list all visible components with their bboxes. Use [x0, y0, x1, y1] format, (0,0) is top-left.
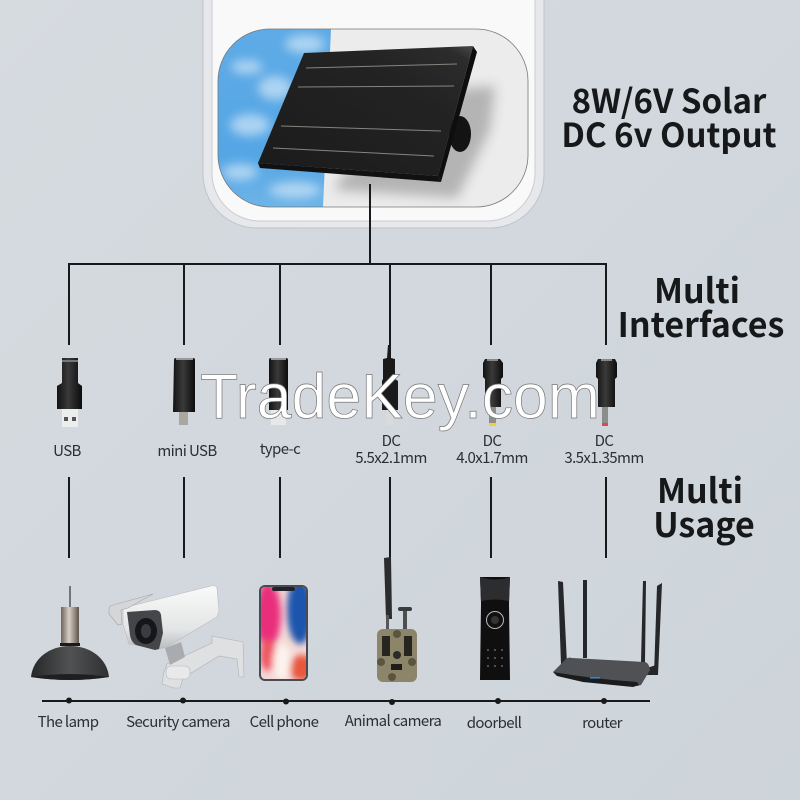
icon: solar panel — [258, 46, 477, 182]
icon: router — [553, 580, 662, 687]
wiring: interface bus — [68, 184, 607, 345]
icon: DC 4.0x1.7 connector — [483, 359, 503, 426]
label: DC 5.5x2.1mm: DC — [382, 430, 401, 451]
icon: USB connector — [57, 358, 82, 427]
label: mini USB: mini USB — [157, 440, 217, 461]
label: doorbell: doorbell — [467, 712, 522, 733]
watermark: TradeKey.com — [200, 362, 600, 432]
icon: doorbell — [480, 577, 510, 680]
heading: solar spec: 8W/6V Solar — [572, 75, 767, 123]
heading: multi usage: Multi — [657, 464, 743, 513]
icon: animal camera — [377, 557, 417, 682]
label: USB: USB — [53, 440, 82, 461]
label: DC 3.5x1.35mm: DC — [595, 430, 614, 451]
icon: lamp — [31, 586, 109, 680]
label: DC 5.5x2.1mm: 5.5x2.1mm — [355, 447, 427, 468]
heading: solar spec: DC 6v Output — [561, 109, 777, 157]
label: The lamp: The lamp — [38, 711, 99, 732]
photo backdrop — [218, 29, 528, 207]
label: DC 4.0x1.7mm — [456, 430, 528, 468]
label: DC 4.0x1.7mm: 4.0x1.7mm — [456, 447, 528, 468]
icon: security camera — [109, 586, 244, 688]
label: DC 4.0x1.7mm: DC — [483, 430, 502, 451]
icon: DC 3.5x1.35 connector — [596, 359, 617, 426]
icon: mini USB connector — [173, 358, 195, 425]
label: Cell phone: Cell phone — [250, 711, 319, 732]
label: Animal camera: Animal camera — [345, 710, 441, 731]
icon: DC 5.5x2.1 connector — [382, 345, 398, 425]
heading: multi usage: Usage — [653, 498, 755, 547]
label: type-c: type-c — [260, 438, 301, 459]
timeline: device baseline — [42, 698, 650, 705]
label: DC 5.5x2.1mm — [355, 430, 427, 468]
label: router: router — [582, 712, 623, 733]
label: Security camera: Security camera — [126, 711, 230, 732]
icon: type-c connector — [269, 358, 288, 425]
heading: multi interfaces: Interfaces — [618, 298, 784, 347]
wiring: usage connectors — [69, 477, 606, 558]
label: DC 3.5x1.35mm — [564, 430, 644, 468]
heading: solar spec — [561, 75, 777, 157]
heading: multi interfaces: Multi — [654, 264, 740, 313]
label: DC 3.5x1.35mm: 3.5x1.35mm — [564, 447, 644, 468]
heading: multi interfaces — [618, 264, 784, 347]
heading: multi usage — [653, 464, 755, 547]
panel: product frame — [203, 0, 544, 228]
icon: cell phone — [259, 585, 308, 681]
